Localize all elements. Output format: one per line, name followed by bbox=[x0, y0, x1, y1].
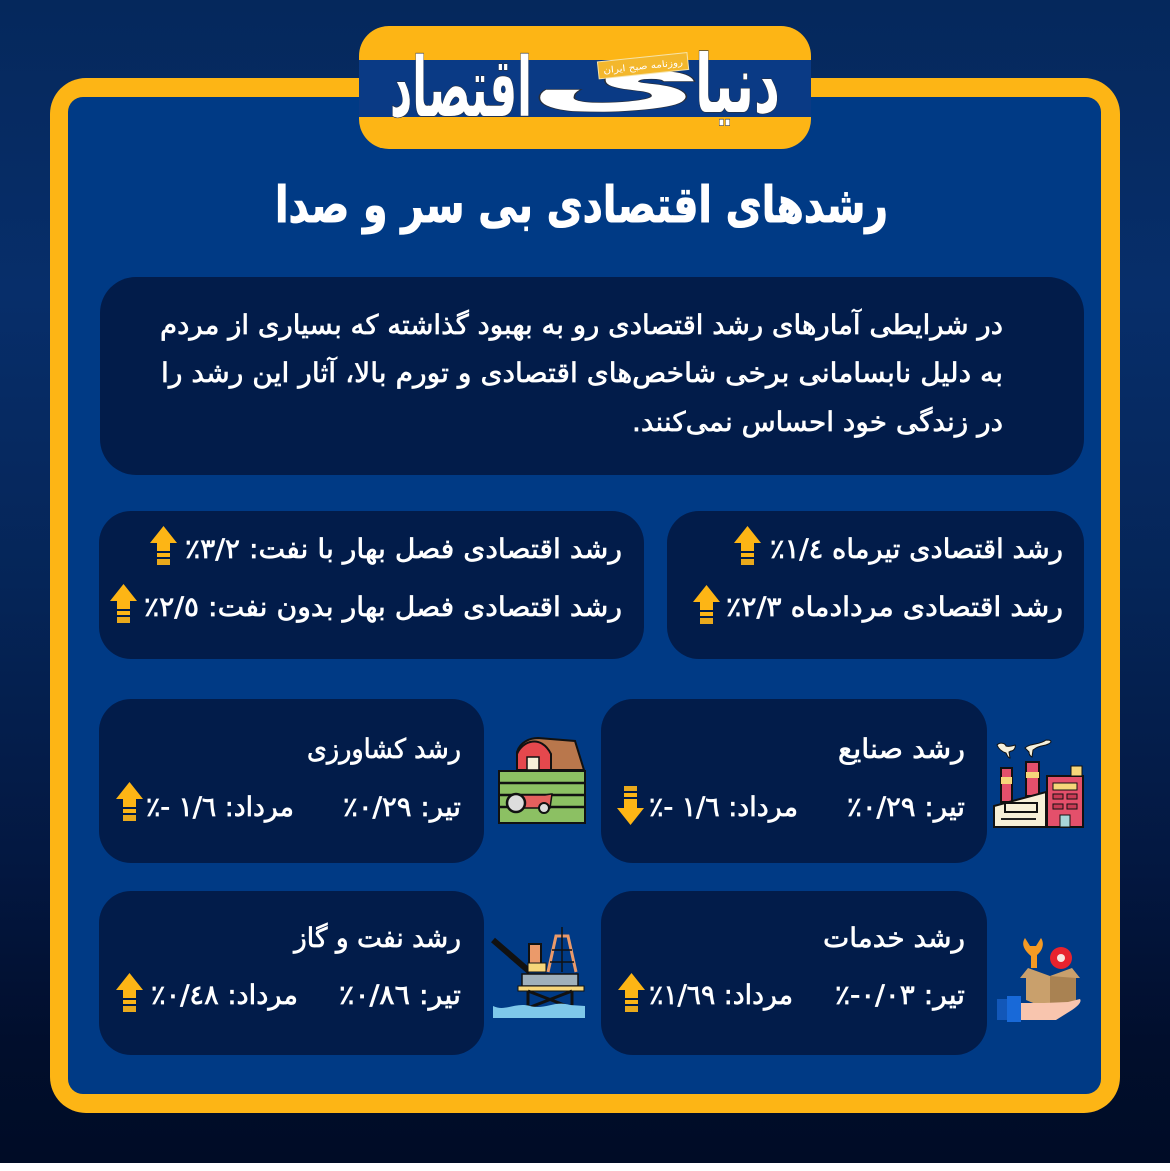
logo tagline badge bbox=[597, 53, 689, 79]
line: Tir growth: رشد اقتصادی تیرماه ⁦٪۱/٤⁩ bbox=[770, 534, 1063, 565]
icon: oil rig bbox=[493, 927, 585, 1018]
panel: services bbox=[601, 891, 987, 1055]
Tir value: تیر: ⁦٪-۰/۰۳⁩ bbox=[835, 980, 965, 1011]
panel: agriculture bbox=[99, 699, 484, 863]
heading: رشد کشاورزی bbox=[307, 734, 461, 765]
logo wordmark: اقتصاد bbox=[390, 41, 532, 136]
heading: رشد نفت و گاز bbox=[292, 922, 461, 954]
logo wordmark: ی bbox=[528, 37, 704, 121]
panel: industry bbox=[601, 699, 987, 863]
intro paragraph: به دلیل نابسامانی برخی شاخص‌های اقتصادی و تورم بالا، آثار این رشد را bbox=[161, 357, 1003, 389]
intro paragraph bbox=[160, 309, 1003, 438]
line: Mordad growth: رشد اقتصادی مردادماه ⁦٪۲/۳⁩ bbox=[726, 592, 1063, 623]
panel: monthly growth bbox=[667, 511, 1084, 659]
panel: spring growth bbox=[99, 511, 644, 659]
logo wordmark: دنیا bbox=[695, 38, 780, 131]
panel: intro text bbox=[100, 277, 1084, 475]
icon: up arrow bbox=[734, 526, 761, 565]
heading: رشد خدمات bbox=[823, 923, 965, 954]
logo plate bbox=[359, 26, 811, 149]
logo tagline badge: روزنامه صبح ایران bbox=[603, 58, 684, 76]
title: رشدهای اقتصادی بی سر و صدا bbox=[275, 176, 888, 235]
Mordad value: مرداد: ⁦٪- ۱/٦⁩ bbox=[649, 792, 798, 823]
Mordad value: مرداد: ⁦٪- ۱/٦⁩ bbox=[146, 792, 294, 823]
Tir value: تیر: ⁦٪۰/٨٦⁩ bbox=[339, 980, 461, 1011]
icon: down arrow bbox=[617, 786, 644, 825]
Mordad value: مرداد: ⁦٪۱/٦۹⁩ bbox=[649, 980, 793, 1011]
intro paragraph: در زندگی خود احساس نمی‌کنند. bbox=[632, 406, 1003, 438]
icon: service box in hand bbox=[997, 938, 1081, 1022]
logo bbox=[359, 26, 811, 149]
icon: up arrow bbox=[116, 782, 143, 821]
icon: barn and tractor bbox=[499, 738, 585, 823]
Tir value: تیر: ⁦٪۰/۲۹⁩ bbox=[847, 792, 965, 823]
icon: up arrow bbox=[110, 584, 137, 623]
icon: up arrow bbox=[116, 973, 143, 1012]
intro paragraph: در شرایطی آمارهای رشد اقتصادی رو به بهبود گذاشته که بسیاری از مردم bbox=[160, 309, 1003, 341]
panel: oil and gas bbox=[99, 891, 484, 1055]
line: spring with oil: رشد اقتصادی فصل بهار با نفت: ⁦٪۳/۲⁩ bbox=[185, 534, 622, 565]
logo wordmark bbox=[390, 37, 780, 136]
Mordad value: مرداد: ⁦٪۰/٤٨⁩ bbox=[151, 980, 298, 1011]
icon: up arrow bbox=[693, 585, 720, 624]
icon: factory bbox=[994, 740, 1083, 827]
heading: رشد صنایع bbox=[838, 734, 965, 765]
icon: up arrow bbox=[150, 526, 177, 565]
line: spring without oil: رشد اقتصادی فصل بهار بدون نفت: ⁦٪۲/٥⁩ bbox=[144, 592, 622, 623]
Tir value: تیر: ⁦٪۰/۲۹⁩ bbox=[343, 792, 461, 823]
icon: up arrow bbox=[618, 973, 645, 1012]
